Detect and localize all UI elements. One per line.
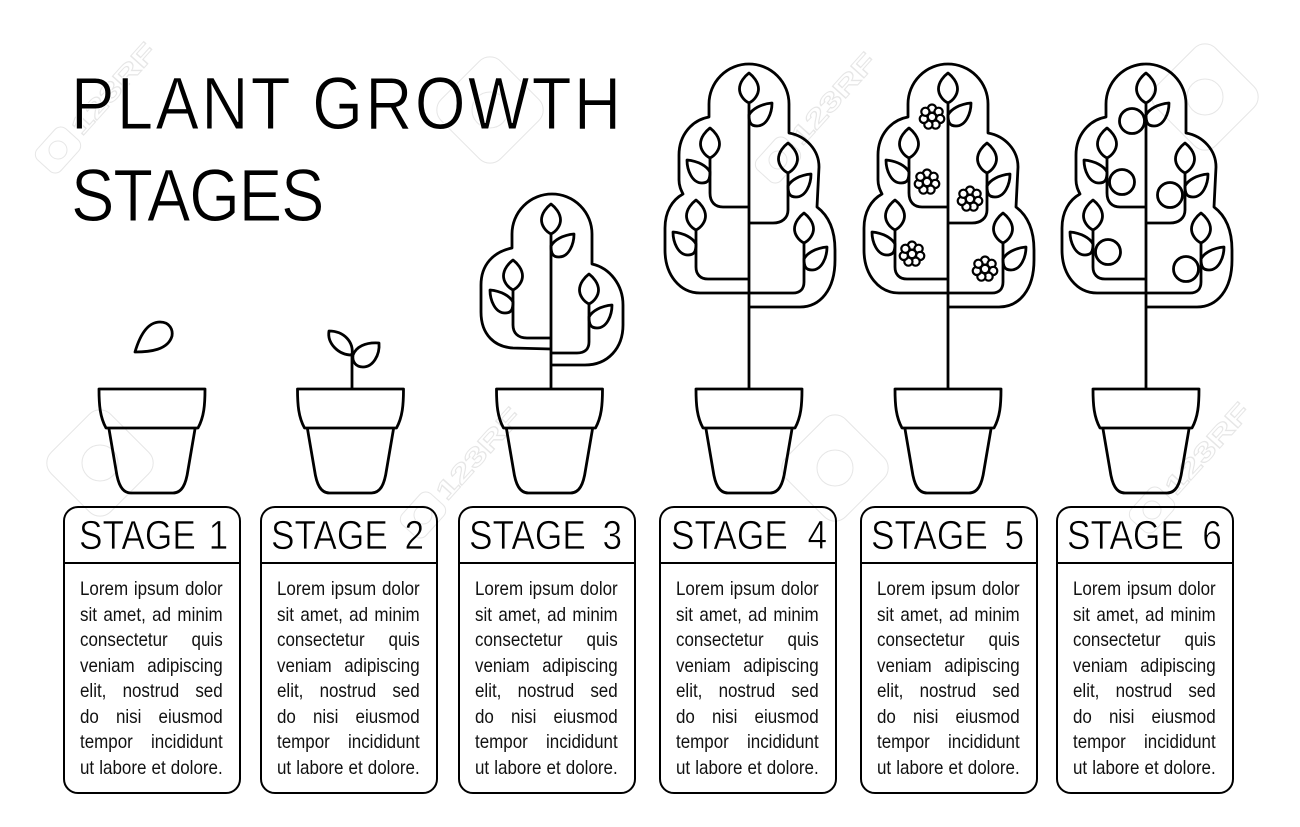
text block: stage 4: consectetur quis — [676, 629, 819, 651]
text block: stage 2: Lorem ipsum dolor — [277, 578, 420, 600]
text block: stage 1: tempor incididunt — [80, 731, 223, 753]
icon: pot 5 — [895, 389, 1001, 493]
text block: stage 1: elit, nostrud sed — [80, 680, 223, 702]
title: STAGES — [71, 154, 324, 237]
icon: full tree — [665, 64, 835, 388]
icon: pot 2 — [298, 389, 404, 493]
watermark stamps: 123RF — [65, 37, 162, 140]
title: PLANT GROWTH — [71, 62, 621, 145]
text block: stage 4: ut labore et dolore. — [676, 756, 819, 778]
text block: stage 4: veniam adipiscing — [676, 654, 819, 676]
text block: stage 5: elit, nostrud sed — [877, 680, 1020, 702]
panel: stage 1 — [63, 506, 241, 794]
text block: stage 5: sit amet, ad minim — [877, 604, 1020, 626]
stage 3: small tree and pot — [481, 194, 623, 493]
heading: stage 1: STAGE 1 — [79, 513, 228, 559]
stage 4: full tree and pot — [665, 64, 835, 493]
panel: stage 5 — [860, 506, 1038, 794]
text block: stage 3 — [475, 578, 618, 778]
text block: stage 1: ut labore et dolore. — [80, 756, 223, 778]
text block: stage 3: do nisi eiusmod — [475, 706, 618, 728]
text block: stage 1 — [80, 578, 223, 778]
text block: stage 5: Lorem ipsum dolor — [877, 578, 1020, 600]
text block: stage 4: tempor incididunt — [676, 731, 819, 753]
heading: stage 5: STAGE 5 — [871, 513, 1024, 559]
text block: stage 3: elit, nostrud sed — [475, 680, 618, 702]
stage 1: seed and pot — [99, 322, 205, 493]
text block: stage 3: sit amet, ad minim — [475, 604, 618, 626]
text block: stage 6: veniam adipiscing — [1073, 654, 1216, 676]
icon: flowering tree — [864, 64, 1034, 388]
text block: stage 1: consectetur quis — [80, 629, 223, 651]
icon: flowers — [900, 104, 997, 281]
text block: stage 4: do nisi eiusmod — [676, 706, 819, 728]
icon: pot 1 — [99, 389, 205, 493]
text block: stage 6: Lorem ipsum dolor — [1073, 578, 1216, 600]
text block: stage 1: sit amet, ad minim — [80, 604, 223, 626]
heading: stage 6: STAGE 6 — [1067, 513, 1222, 559]
title — [71, 62, 621, 237]
icon: pot 4 — [696, 389, 802, 493]
text block: stage 2: consectetur quis — [277, 629, 420, 651]
text block: stage 2: do nisi eiusmod — [277, 706, 420, 728]
text block: stage 2: veniam adipiscing — [277, 654, 420, 676]
stage 6: fruiting tree and pot — [1062, 64, 1232, 493]
watermark stamps: 123RF — [785, 47, 882, 150]
text block: stage 1: Lorem ipsum dolor — [80, 578, 223, 600]
text block: stage 6 — [1073, 578, 1216, 778]
text block: stage 2: sit amet, ad minim — [277, 604, 420, 626]
text block: stage 6: tempor incididunt — [1073, 731, 1216, 753]
text block: stage 1: veniam adipiscing — [80, 654, 223, 676]
text block: stage 3: veniam adipiscing — [475, 654, 618, 676]
panel: stage 4 — [659, 506, 837, 794]
text block: stage 6: ut labore et dolore. — [1073, 756, 1216, 778]
text block: stage 3: tempor incididunt — [475, 731, 618, 753]
text block: stage 4: sit amet, ad minim — [676, 604, 819, 626]
text block: stage 5: tempor incididunt — [877, 731, 1020, 753]
text block: stage 6: elit, nostrud sed — [1073, 680, 1216, 702]
heading: stage 4: STAGE 4 — [671, 513, 827, 559]
panel: stage 3 — [458, 506, 636, 794]
text block: stage 3: consectetur quis — [475, 629, 618, 651]
text block: stage 5: veniam adipiscing — [877, 654, 1020, 676]
text block: stage 6: do nisi eiusmod — [1073, 706, 1216, 728]
panel: stage 6 — [1056, 506, 1234, 794]
text block: stage 1: do nisi eiusmod — [80, 706, 223, 728]
text block: stage 5: consectetur quis — [877, 629, 1020, 651]
watermark stamps: 123RF — [430, 402, 527, 505]
icon: seed — [135, 322, 172, 352]
icon: small tree — [481, 194, 623, 388]
text block: stage 3: Lorem ipsum dolor — [475, 578, 618, 600]
text block: stage 3: ut labore et dolore. — [475, 756, 618, 778]
heading: stage 2: STAGE 2 — [271, 513, 424, 559]
text block: stage 2: tempor incididunt — [277, 731, 420, 753]
stage 5: flowering tree and pot — [864, 64, 1034, 493]
text block: stage 2 — [277, 578, 420, 778]
text block: stage 6: consectetur quis — [1073, 629, 1216, 651]
text block: stage 4: elit, nostrud sed — [676, 680, 819, 702]
text block: stage 5: ut labore et dolore. — [877, 756, 1020, 778]
text block: stage 2: ut labore et dolore. — [277, 756, 420, 778]
text block: stage 4: Lorem ipsum dolor — [676, 578, 819, 600]
icon: pot 6 — [1093, 389, 1199, 493]
icon: fruits — [1096, 108, 1198, 282]
watermark stamps: 123RF — [1159, 397, 1256, 500]
icon: fruiting tree — [1062, 64, 1232, 388]
heading: stage 3: STAGE 3 — [469, 513, 622, 559]
text block: stage 6: sit amet, ad minim — [1073, 604, 1216, 626]
text block: stage 5: do nisi eiusmod — [877, 706, 1020, 728]
icon: sprout — [329, 331, 379, 389]
text block: stage 2: elit, nostrud sed — [277, 680, 420, 702]
panel: stage 2 — [260, 506, 438, 794]
stage 2: sprout and pot — [298, 331, 404, 493]
icon: pot 3 — [496, 389, 602, 493]
text block: stage 5 — [877, 578, 1020, 778]
text block: stage 4 — [676, 578, 819, 778]
